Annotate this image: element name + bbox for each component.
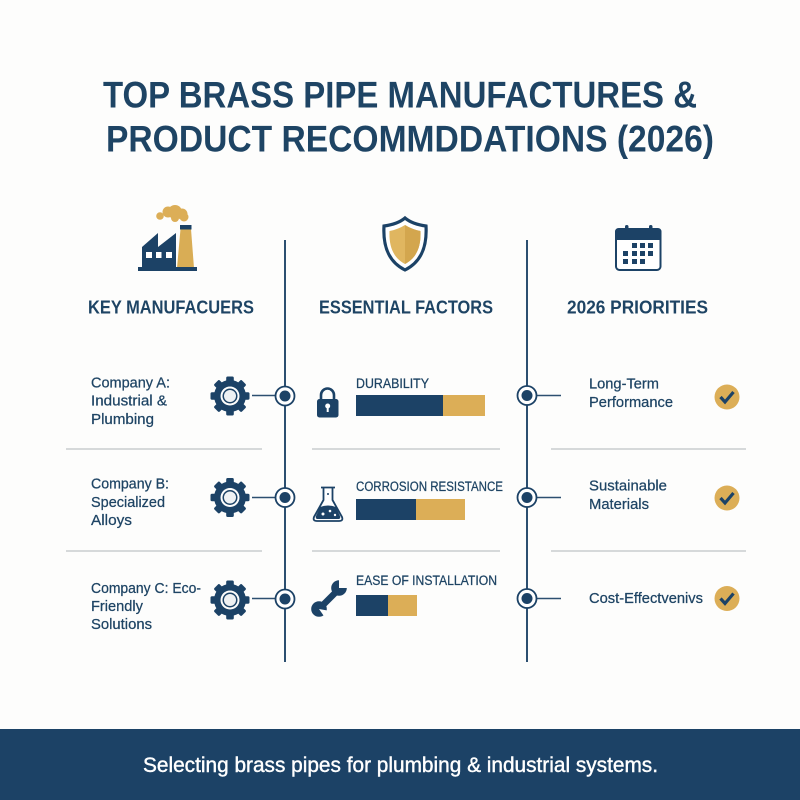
icon: gear A bbox=[210, 376, 250, 416]
Company B text: Company B: bbox=[91, 476, 169, 492]
title: TOP BRASS PIPE MANUFACTURES & bbox=[103, 74, 697, 116]
icon: check 3 bbox=[714, 586, 740, 611]
icon: shield bbox=[384, 218, 426, 270]
footer banner bbox=[0, 729, 800, 800]
panel: key manufacturers bbox=[91, 374, 250, 633]
icon: check 1 bbox=[714, 384, 740, 410]
title: PRODUCT RECOMMDDATIONS (2026) bbox=[106, 118, 714, 160]
long-term performance text bbox=[589, 376, 673, 411]
timeline: right bbox=[518, 240, 561, 662]
timeline: left bbox=[252, 240, 294, 662]
durability bar bbox=[356, 395, 485, 416]
long-term performance text: Performance bbox=[589, 394, 673, 411]
icon: padlock bbox=[317, 389, 338, 418]
Company A text: Industrial & bbox=[91, 392, 167, 410]
Company A text bbox=[91, 374, 170, 428]
durability label: DURABILITY bbox=[356, 376, 429, 391]
sustainable materials text bbox=[589, 478, 667, 513]
Company B text bbox=[91, 476, 169, 529]
title bbox=[103, 74, 714, 160]
column headings bbox=[88, 298, 708, 318]
Company B text: Specialized bbox=[91, 494, 165, 511]
ease of installation label: EASE OF INSTALLATION bbox=[356, 573, 497, 588]
long-term performance text: Long-Term bbox=[589, 376, 659, 392]
corrosion resistance bar bbox=[356, 499, 465, 520]
Company C text bbox=[91, 580, 201, 633]
icon: gear C bbox=[210, 580, 250, 620]
column headings: KEY MANUFACUERS bbox=[88, 298, 254, 318]
ease of installation bar bbox=[356, 595, 417, 616]
cost-effectiveness text: Cost-Effectvenivs bbox=[589, 590, 703, 607]
icon: gear B bbox=[210, 478, 250, 517]
footer banner: Selecting brass pipes for plumbing & industrial systems. bbox=[143, 754, 658, 777]
panel: 2026 priorities bbox=[589, 376, 740, 611]
panel: essential factors bbox=[311, 376, 503, 621]
icon: wrench bbox=[311, 578, 349, 621]
Company B text: Alloys bbox=[91, 512, 132, 529]
Company C text: Solutions bbox=[91, 616, 152, 633]
icon: flask bbox=[314, 488, 342, 521]
column headings: 2026 PRIORITIES bbox=[567, 298, 708, 318]
Company A text: Company A: bbox=[91, 374, 170, 392]
icon: factory bbox=[138, 205, 197, 271]
icon: check 2 bbox=[714, 486, 740, 510]
Company C text: Company C: Eco- bbox=[91, 580, 201, 597]
sustainable materials text: Sustainable bbox=[589, 478, 667, 494]
Company A text: Plumbing bbox=[91, 411, 154, 428]
column headings: ESSENTIAL FACTORS bbox=[319, 298, 493, 318]
icon: calendar bbox=[616, 225, 660, 270]
sustainable materials text: Materials bbox=[589, 496, 649, 513]
corrosion resistance label: CORROSION RESISTANCE bbox=[356, 479, 503, 494]
Company C text: Friendly bbox=[91, 598, 143, 615]
